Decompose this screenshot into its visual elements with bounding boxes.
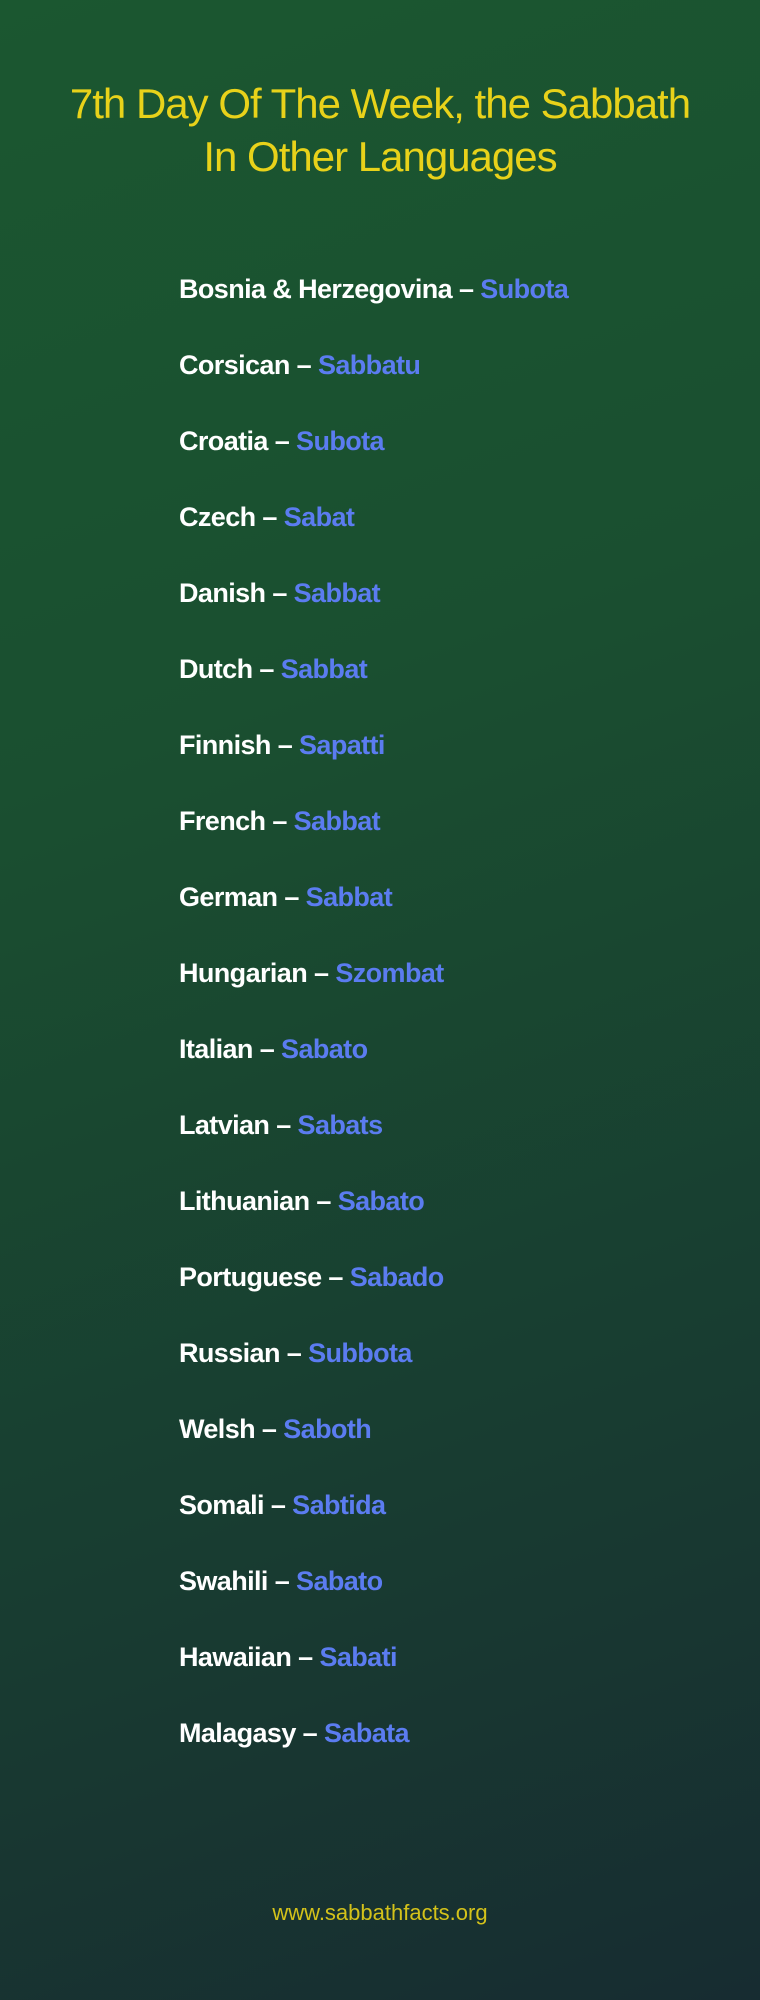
row: Italian: Italian – Sabato xyxy=(179,1034,367,1064)
row: Finnish: Finnish – Sapatti xyxy=(179,730,385,760)
row: Czech: Czech – Sabat xyxy=(179,502,354,532)
row: Corsican: Corsican – Sabbatu xyxy=(179,350,420,380)
row: Danish: Danish – Sabbat xyxy=(179,578,380,608)
title: In Other Languages xyxy=(203,133,557,180)
row: Hungarian: Hungarian – Szombat xyxy=(179,958,444,988)
row: Welsh: Welsh – Saboth xyxy=(179,1414,371,1444)
row: Latvian: Latvian – Sabats xyxy=(179,1110,382,1140)
row: Russian: Russian – Subbota xyxy=(179,1338,412,1368)
row: French: French – Sabbat xyxy=(179,806,380,836)
title: 7th Day Of The Week, the Sabbath xyxy=(70,80,690,127)
row: Bosnia: Bosnia & Herzegovina – Subota xyxy=(179,274,568,304)
title xyxy=(70,80,690,180)
row: Croatia: Croatia – Subota xyxy=(179,426,384,456)
footer url: www.sabbathfacts.org xyxy=(272,1900,488,1925)
row: Hawaiian: Hawaiian – Sabati xyxy=(179,1642,397,1672)
row: Lithuanian: Lithuanian – Sabato xyxy=(179,1186,424,1216)
row: Malagasy: Malagasy – Sabata xyxy=(179,1718,409,1748)
row: Dutch: Dutch – Sabbat xyxy=(179,654,367,684)
row: Portuguese: Portuguese – Sabado xyxy=(179,1262,444,1292)
row: Swahili: Swahili – Sabato xyxy=(179,1566,382,1596)
row: German: German – Sabbat xyxy=(179,882,392,912)
language list xyxy=(179,274,569,1748)
row: Somali: Somali – Sabtida xyxy=(179,1490,385,1520)
